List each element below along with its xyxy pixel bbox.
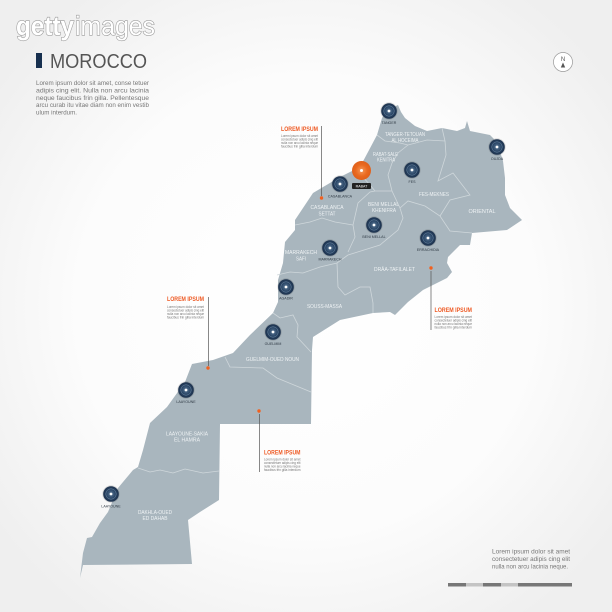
callout: south	[257, 409, 301, 472]
pin: Marrakech: MARRAKECH	[319, 258, 342, 262]
intro text block: ulum interdum.	[36, 110, 77, 116]
pin: Dakhla: LAAYOUNE	[101, 504, 121, 508]
pin: Fes	[403, 161, 421, 184]
region labels: RABAT-SALE	[373, 152, 398, 158]
watermark: gettyimages logo	[16, 11, 155, 41]
region labels: GUELMIM-OUED NOUN	[246, 357, 299, 363]
region labels: ORIENTAL	[468, 209, 496, 215]
pin: Dakhla	[101, 485, 121, 508]
pin: Casablanca: CASABLANCA	[328, 194, 353, 198]
callout: north: Lorem ipsum dolor sit amet	[281, 134, 318, 138]
callout: south: nulla non arcu lacinia neque	[264, 464, 301, 468]
region labels: KHENIFRA	[372, 208, 396, 214]
watermark: gettyimages logo: getty	[16, 11, 74, 41]
callout: east: faucibus frin gilla interdum	[434, 326, 472, 330]
callout: north: faucibus frin gilla interdum	[281, 144, 318, 148]
callout: west: Lorem ipsum dolor sit amet	[167, 305, 204, 309]
callout: east: Lorem ipsum dolor sit amet	[434, 315, 472, 319]
callout: west: LOREM IPSUM	[167, 296, 204, 303]
callout: south: Lorem ipsum dolor sit amet	[264, 458, 301, 462]
pin: Rabat capital: RABAT	[356, 184, 368, 188]
pin: Laayoune city: LAAYOUNE	[176, 400, 196, 404]
icon: compass north: N	[561, 57, 565, 63]
callout: north: LOREM IPSUM	[281, 126, 318, 133]
region labels	[138, 132, 496, 522]
scale bar	[448, 583, 572, 586]
pin: Oujda: OUJDA	[491, 157, 504, 161]
intro text block: adipis cing elit. Nulla non arcu lacinia	[36, 88, 149, 94]
callout: west: nulla non arcu lacinia neque	[167, 312, 204, 316]
callout: north	[281, 126, 323, 200]
region labels: EL HAMRA	[174, 438, 200, 444]
region borders	[138, 128, 472, 473]
footer text block: Lorem ipsum dolor sit amet	[492, 548, 570, 556]
callout: south: consectetuer adipis cing elit	[264, 461, 301, 465]
callout: north: consectetuer adipis cing elit	[281, 138, 318, 142]
region labels: SOUSS-MASSA	[307, 304, 342, 310]
region labels: SETTAT	[318, 212, 336, 218]
pin: Casablanca	[328, 175, 353, 198]
region labels: CASABLANCA	[310, 205, 344, 211]
pin: Tanger: TANGER	[382, 121, 397, 125]
callout: north: nulla non arcu lacinia neque	[281, 141, 318, 145]
callout: south: LOREM IPSUM	[264, 450, 300, 456]
pin: Fes: FES	[408, 180, 416, 184]
pin: Guelmim: GUELMIM	[265, 342, 281, 346]
map: Morocco	[80, 105, 522, 578]
region labels: ED DAHAB	[142, 516, 168, 522]
callout: east: consectetuer adipis cing elit	[434, 318, 472, 322]
callout: west: faucibus frin gilla interdum	[167, 316, 204, 320]
watermark: gettyimages logo: images	[75, 11, 155, 41]
region labels: DAKHLA-OUED	[138, 510, 172, 516]
pin: Beni Mellal: BENI MELLAL	[362, 235, 386, 239]
pin: Marrakech	[319, 239, 342, 262]
intro text block: Lorem ipsum dolor sit amet, conse tetuer	[36, 80, 150, 87]
pin: Guelmim	[264, 323, 282, 346]
pin: Agadir	[277, 278, 295, 300]
region labels: KENITRA	[377, 158, 395, 164]
callout: west	[167, 296, 210, 370]
callout: east	[429, 266, 472, 330]
pin: Errachidia: ERRACHIDIA	[417, 248, 440, 252]
region labels: BENI MELLAL	[368, 202, 399, 208]
pin: Oujda	[488, 138, 506, 161]
country outline	[80, 105, 522, 578]
intro text block: arcu curab itu vitae diam non enim vestib	[36, 102, 149, 109]
region labels: TANGER-TETOUAN	[385, 132, 425, 138]
region labels: DRÂA-TAFILALET	[374, 266, 416, 273]
pin: Laayoune city	[176, 381, 196, 404]
pin: Tanger	[380, 102, 398, 125]
pin: Beni Mellal	[362, 216, 386, 239]
title: MOROCCO: MOROCCO	[50, 50, 147, 73]
footer text block: nulla non arcu lacinia neque.	[492, 564, 568, 570]
intro text block	[36, 80, 150, 116]
icon: compass north	[554, 52, 572, 72]
footer text block: consectetuer adipis cing elit	[492, 556, 570, 563]
pin: Rabat capital	[352, 161, 371, 189]
region labels: AL HOCEIMA	[392, 138, 419, 144]
region labels: SAFI	[296, 256, 306, 262]
region labels: FES-MEKNES	[419, 192, 449, 198]
callout: west: consectetuer adipis cing elit	[167, 308, 204, 312]
callout: south: faucibus frin gilla interdum	[264, 468, 301, 472]
intro text block: neque faucibus frin gilla. Pellentesque	[36, 95, 149, 102]
callout: east: nulla non arcu lacinia neque	[434, 322, 472, 326]
region labels: LAAYOUNE-SAKIA	[166, 432, 208, 438]
footer text block	[492, 548, 570, 570]
pin: Agadir: AGADIR	[279, 296, 293, 300]
region labels: MARRAKECH	[285, 250, 317, 256]
callout: east: LOREM IPSUM	[434, 307, 472, 314]
pin: Errachidia	[417, 229, 440, 252]
